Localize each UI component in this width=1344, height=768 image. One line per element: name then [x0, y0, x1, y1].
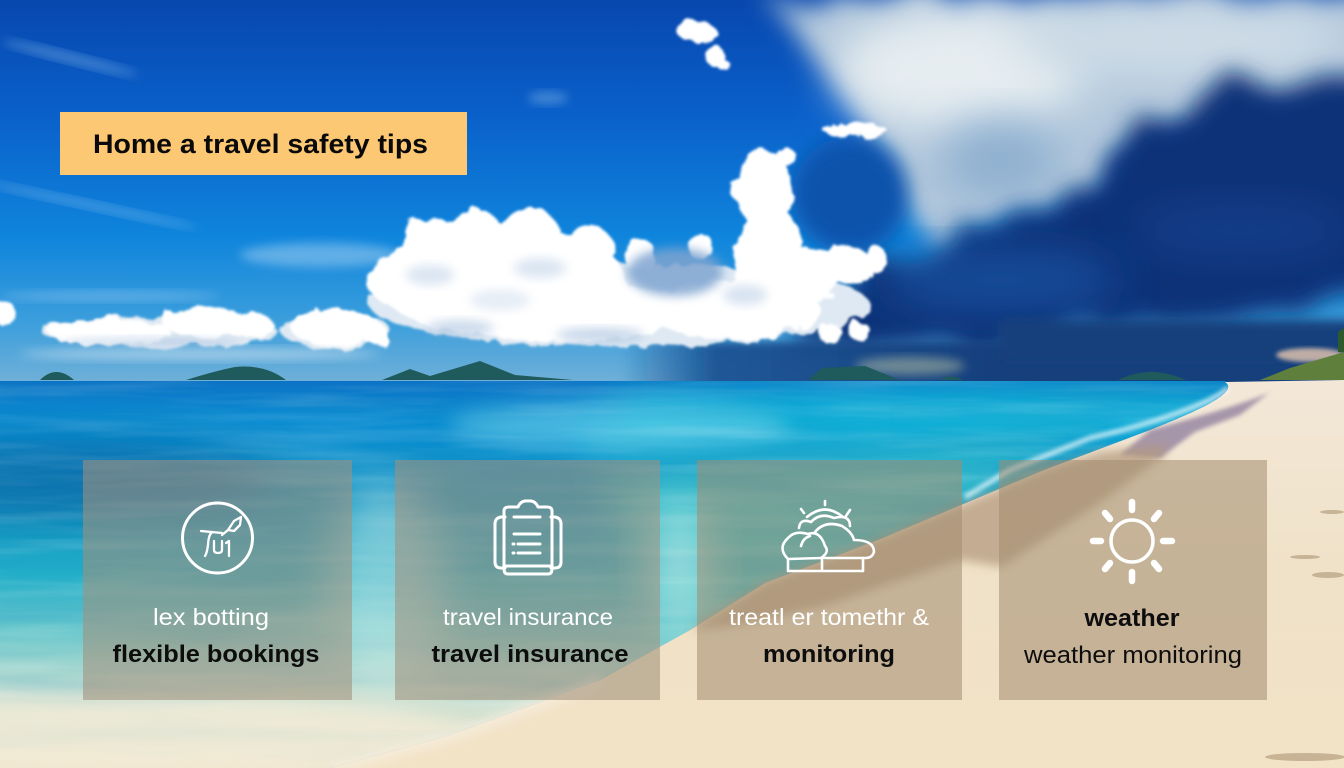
panel: weather monitoring text and cloud icon: monitoring [763, 641, 895, 668]
high streak clouds [0, 36, 568, 301]
storm cloud: dark lower mass [620, 70, 1344, 402]
panel: flexible bookings: flexible bookings [112, 641, 320, 668]
title banner [60, 112, 467, 175]
islands on the horizon [40, 361, 1186, 380]
panel: travel insurance [395, 460, 660, 700]
panel: travel insurance: travel insurance [432, 641, 628, 668]
white cumulus clouds [0, 21, 887, 360]
icon: sun [1093, 502, 1172, 581]
background: sand beach [330, 328, 1344, 768]
cloud puffs [0, 21, 887, 346]
cloud shading base [42, 263, 870, 348]
panel: flexible bookings [83, 460, 352, 700]
panel: weather: weather monitoring [1023, 642, 1242, 669]
panel: flexible bookings: lex botting [153, 604, 269, 630]
icon: clouds and sun [782, 501, 874, 571]
panel: weather monitoring text and cloud icon: treatl er tomethr & [729, 604, 929, 630]
icon: flexible booking badge [182, 503, 252, 573]
icon: clipboard [495, 501, 561, 574]
background: sky [0, 0, 1344, 382]
storm cloud: bright upper mass [770, 0, 1344, 250]
title banner: Home a travel safety tips [93, 129, 428, 159]
cloud inner shadows [60, 248, 767, 347]
panel: weather monitoring text and cloud icon [697, 460, 962, 700]
background: sea [0, 380, 1344, 768]
panel: weather: weather [1083, 605, 1180, 632]
panel: weather [999, 460, 1267, 700]
panel: travel insurance: travel insurance [443, 604, 613, 630]
